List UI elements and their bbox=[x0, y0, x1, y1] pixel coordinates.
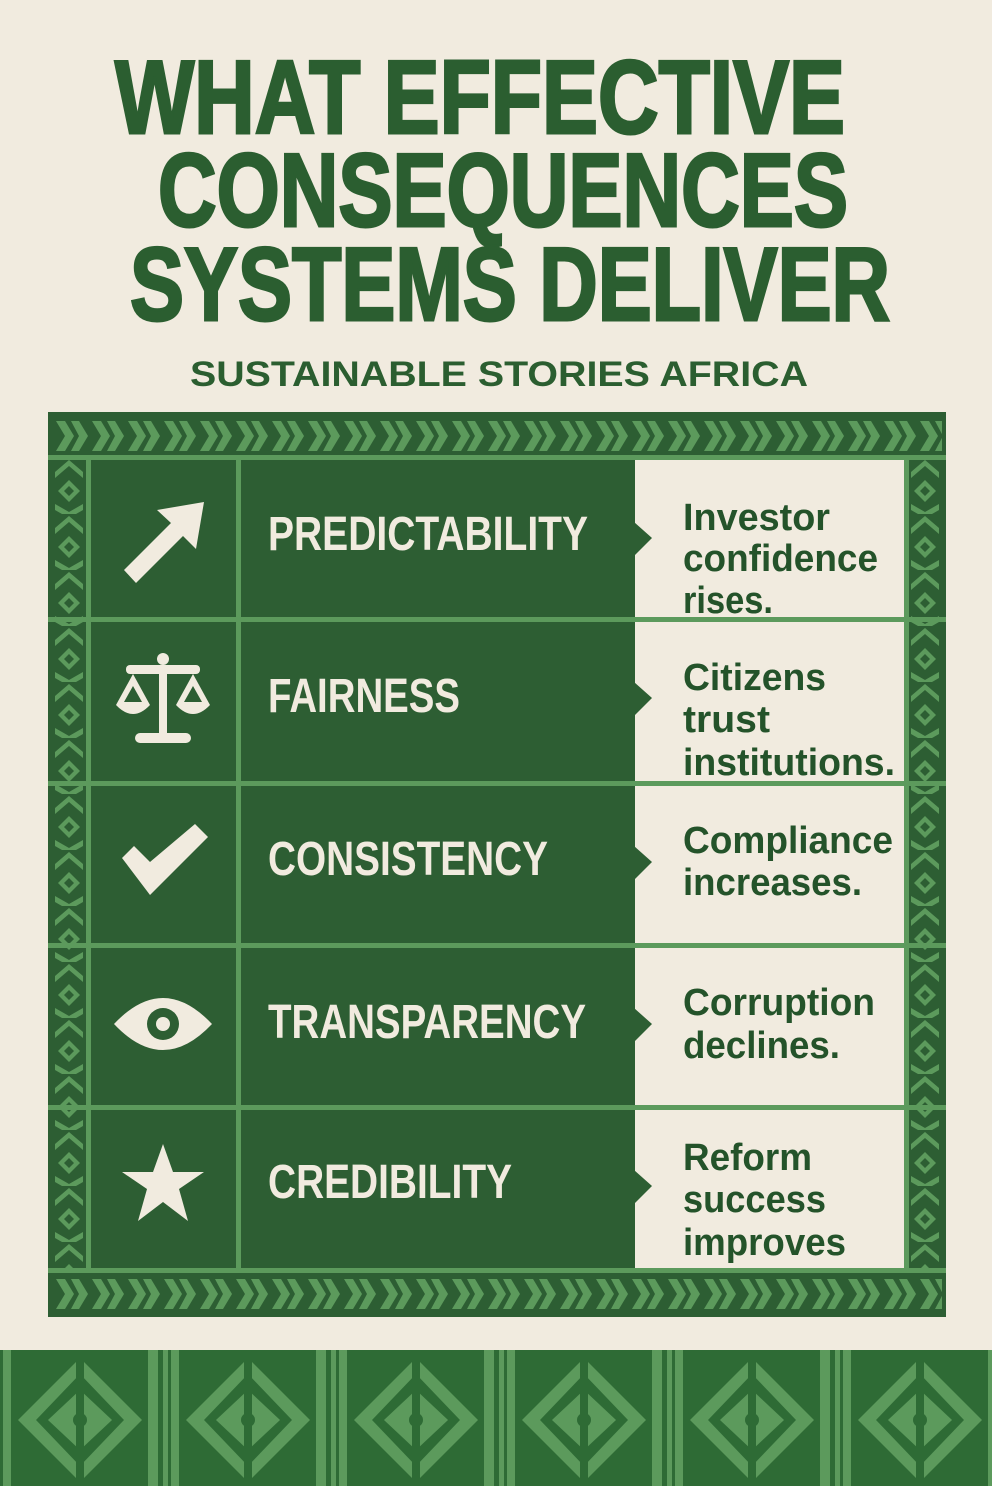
row: predictability: confidence bbox=[683, 538, 878, 580]
row: consistency bbox=[122, 786, 904, 943]
bottom patterned band bbox=[0, 1350, 992, 1486]
row: consistency: increases. bbox=[683, 862, 862, 904]
row: credibility: CREDIBILITY bbox=[268, 1156, 512, 1209]
row: fairness: trust bbox=[683, 699, 770, 741]
row: credibility: improves bbox=[683, 1222, 846, 1264]
row: predictability bbox=[124, 460, 904, 622]
row: fairness: Citizens bbox=[683, 657, 826, 699]
row: predictability: rises. bbox=[683, 580, 773, 622]
row: predictability: Investor bbox=[683, 497, 830, 539]
row: fairness: institutions. bbox=[683, 742, 895, 784]
icon: eye bbox=[114, 998, 212, 1050]
row: credibility: success bbox=[683, 1179, 826, 1221]
icon: star bbox=[122, 1144, 204, 1221]
row: consistency: Compliance bbox=[683, 820, 893, 862]
icon: check mark bbox=[122, 824, 208, 895]
row: fairness: FAIRNESS bbox=[268, 670, 460, 723]
subtitle: SUSTAINABLE STORIES AFRICA bbox=[190, 355, 808, 394]
row: credibility bbox=[122, 1110, 904, 1268]
panel: main table bbox=[48, 412, 946, 1317]
icon: arrow bbox=[124, 502, 204, 583]
row: transparency: TRANSPARENCY bbox=[268, 996, 586, 1049]
row: predictability: PREDICTABILITY bbox=[268, 508, 588, 561]
row: transparency bbox=[114, 948, 904, 1105]
title bbox=[115, 40, 890, 343]
row: transparency: Corruption bbox=[683, 982, 875, 1024]
row: consistency: CONSISTENCY bbox=[268, 833, 548, 886]
row: fairness bbox=[116, 622, 904, 784]
row: credibility: Reform bbox=[683, 1137, 812, 1179]
icon: scales bbox=[116, 653, 210, 743]
row: transparency: declines. bbox=[683, 1025, 840, 1067]
